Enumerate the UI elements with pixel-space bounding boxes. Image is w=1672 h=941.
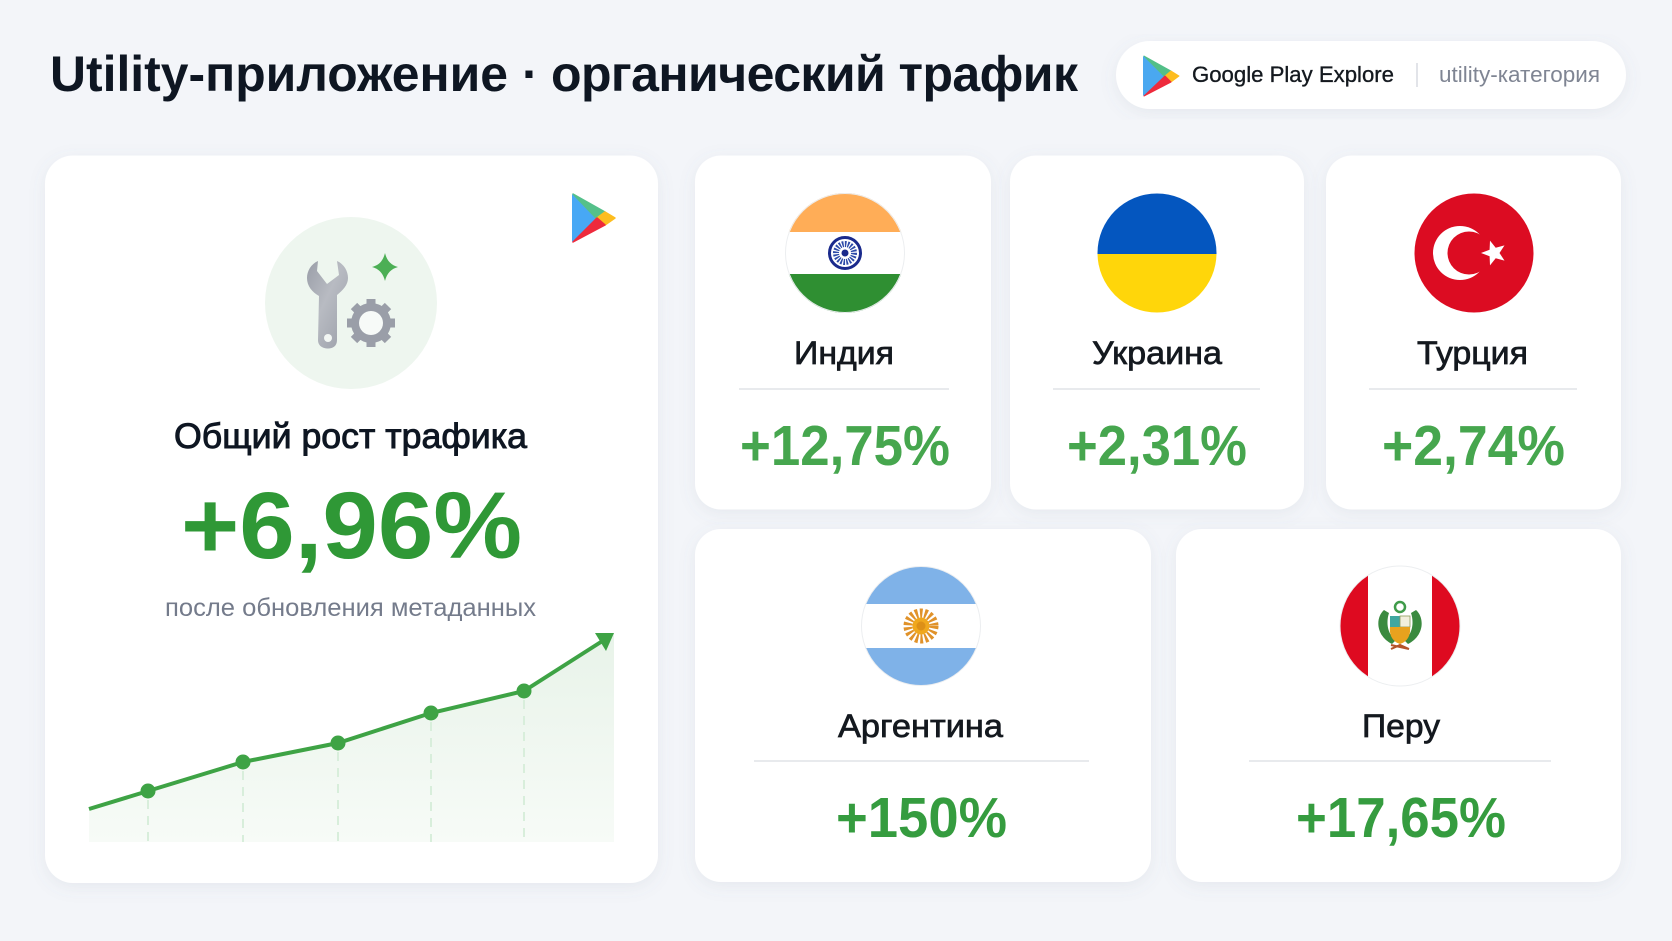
panel: Argentina bbox=[695, 529, 1151, 882]
icon: Ukraine flag bbox=[1097, 193, 1217, 314]
growth value: +150% bbox=[836, 786, 1007, 850]
icon: gear bbox=[347, 299, 395, 347]
growth value: +12,75% bbox=[740, 414, 950, 478]
icon: wrench bbox=[307, 261, 348, 348]
icon: Turkey flag bbox=[1414, 194, 1534, 312]
icon: play logo bbox=[573, 194, 615, 242]
main value: +6,96% bbox=[181, 473, 522, 579]
country name: Украина bbox=[1092, 335, 1222, 371]
badge label: Google Play Explore bbox=[1192, 62, 1394, 87]
country name: Индия bbox=[794, 335, 894, 371]
title: органический трафик bbox=[551, 46, 1079, 102]
title bbox=[50, 46, 1079, 102]
icon: Google Play logo bbox=[1144, 56, 1179, 96]
panel: India bbox=[695, 156, 991, 510]
icon: sparkle bbox=[372, 253, 398, 281]
icon: Argentina flag bbox=[866, 567, 976, 685]
source badge bbox=[1116, 41, 1626, 109]
growth value: +17,65% bbox=[1296, 786, 1506, 850]
label: Общий рост трафика bbox=[174, 417, 528, 456]
icon: tools in circle bbox=[265, 217, 437, 389]
growth value: +2,31% bbox=[1067, 414, 1247, 478]
country name: Турция bbox=[1417, 335, 1528, 371]
panel: Peru bbox=[1176, 529, 1621, 882]
title: Utility-приложение bbox=[50, 46, 508, 102]
chart: growth line bbox=[89, 633, 614, 842]
panel: overall growth bbox=[45, 156, 658, 883]
icon: India flag bbox=[785, 193, 905, 314]
panel: Turkey bbox=[1326, 156, 1621, 510]
country name: Перу bbox=[1362, 708, 1440, 744]
panel: Ukraine bbox=[1010, 156, 1304, 510]
badge category: utility-категория bbox=[1439, 62, 1600, 87]
icon: Peru flag bbox=[1340, 576, 1460, 676]
growth value: +2,74% bbox=[1382, 414, 1565, 478]
caption: после обновления метаданных bbox=[165, 594, 537, 622]
country name: Аргентина bbox=[838, 708, 1003, 744]
title: · bbox=[522, 46, 539, 102]
